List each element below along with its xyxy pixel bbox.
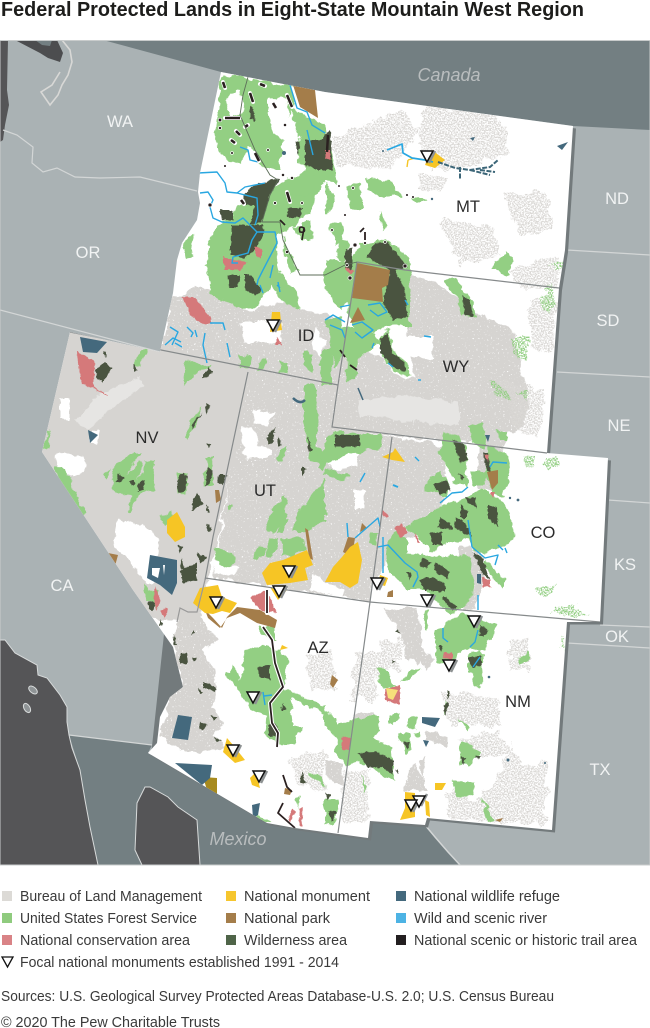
- state and country labels: OR: [76, 244, 100, 262]
- legend: United States Forest Service: United States Forest Service: [20, 911, 197, 927]
- marker shadows: [218, 151, 482, 812]
- state and country labels: NM: [505, 693, 531, 711]
- Gulf of California: [135, 787, 200, 865]
- Wild and scenic rivers: [165, 85, 507, 705]
- sparse Forest Service grasslands: [488, 260, 590, 652]
- marker triangles: [210, 151, 480, 811]
- National monuments: [167, 150, 446, 820]
- state borders: [70, 262, 600, 833]
- state and country labels: AZ: [307, 639, 329, 657]
- National parks: [108, 85, 503, 822]
- state and country labels: ID: [298, 327, 314, 345]
- Channel Islands: [22, 686, 38, 714]
- patch white over Desert refuge: [152, 565, 165, 578]
- state and country labels: TX: [589, 761, 611, 779]
- legend: National park: National park: [244, 911, 331, 927]
- state and country labels: MT: [456, 198, 480, 216]
- focal national monument markers: [210, 151, 482, 812]
- state and country labels: Mexico: [209, 829, 267, 849]
- legend: focal national monuments: Focal national monuments established 1991 - 2014: [20, 955, 339, 971]
- state and country labels: NE: [608, 417, 630, 435]
- sources: Sources: U.S. Geological Survey Protected Areas Database-U.S. 2.0; U.S. Census Bureau: [1, 989, 554, 1005]
- legend: National scenic or historic trail area: National scenic or historic trail area: [414, 933, 638, 949]
- legend: National monument: National monument: [244, 889, 370, 905]
- Puget Sound: [15, 40, 63, 62]
- white holes in Forest Service lands: [200, 89, 302, 176]
- Pacific coast at Washington: [0, 40, 9, 142]
- Mexico: [69, 735, 460, 865]
- state and country labels: [51, 65, 636, 849]
- National conservation areas: [77, 150, 495, 827]
- Idaho-Montana divide: [240, 77, 357, 275]
- legend: Wilderness area: Wilderness area: [244, 933, 348, 949]
- Pacific Ocean: [0, 640, 98, 865]
- legend: [2, 889, 638, 971]
- state and country labels: Canada: [417, 65, 481, 85]
- lighter BLM bands: [75, 375, 460, 430]
- United States Forest Service lands: [42, 75, 530, 825]
- state and country labels: CO: [531, 524, 556, 542]
- state and country labels: UT: [254, 482, 276, 500]
- neighbouring state borders: [0, 130, 650, 865]
- state and country labels: CA: [51, 577, 73, 595]
- eight-state land mass: [42, 72, 608, 838]
- legend: National conservation area: National conservation area: [20, 933, 191, 949]
- sparse BLM specks: [290, 105, 558, 823]
- state and country labels: WA: [107, 113, 133, 131]
- National scenic or historic trail areas: [223, 82, 365, 828]
- Bureau of Land Management: Nevada: [36, 325, 252, 622]
- non-federal gaps: [55, 322, 435, 780]
- National wildlife refuges: [80, 137, 568, 818]
- state and country labels: NV: [136, 429, 158, 447]
- Bureau of Land Management: Utah, Idaho, Wyoming, Colorado, Arizona, New Mexico: [160, 272, 528, 790]
- legend: National wildlife refuge: National wildlife refuge: [414, 889, 560, 905]
- Wilderness areas: [95, 105, 498, 822]
- legend: Wild and scenic river: Wild and scenic river: [414, 911, 547, 927]
- state and country labels: OK: [605, 628, 629, 646]
- state and country labels: ND: [605, 190, 629, 208]
- state and country labels: KS: [614, 556, 636, 574]
- state and country labels: WY: [443, 358, 469, 376]
- trail halos: [223, 82, 292, 747]
- legend: Bureau of Land Management: Bureau of Land Management: [20, 889, 202, 905]
- Canada: [103, 40, 650, 130]
- state and country labels: SD: [597, 312, 620, 330]
- land shadow: [151, 74, 611, 840]
